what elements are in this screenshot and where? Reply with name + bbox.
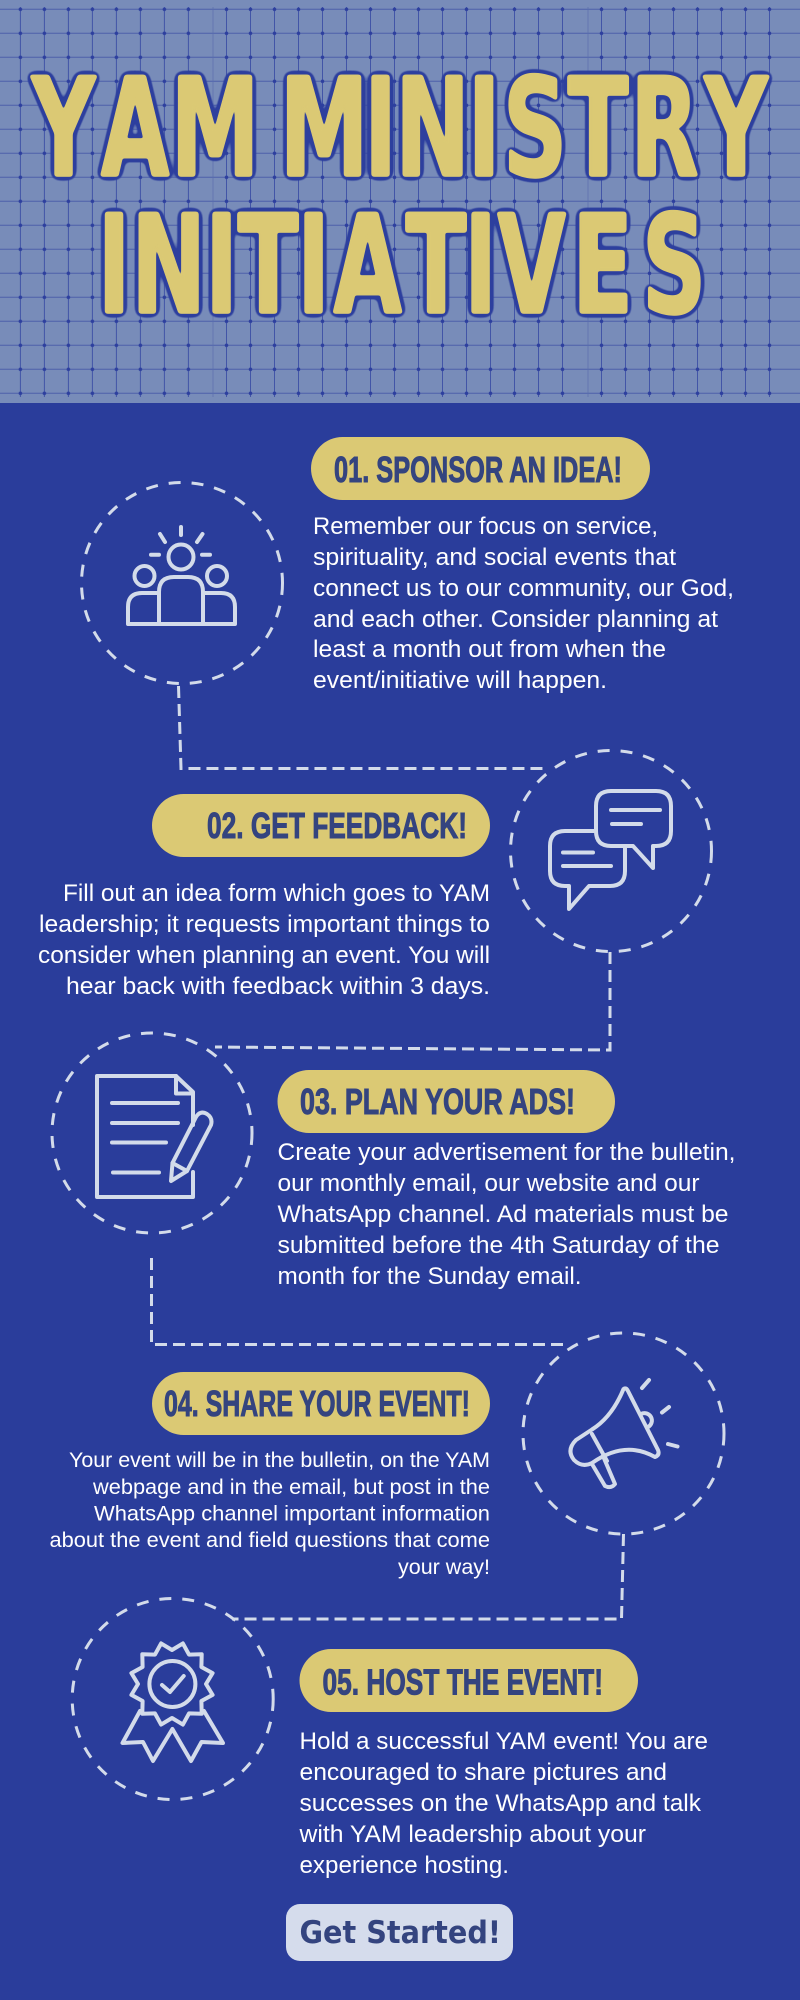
text block 1: connect us to our community, our God, [313, 575, 734, 602]
dashed circle 3 [52, 1033, 252, 1233]
text block 5 [298, 1728, 708, 1879]
heading pill 3: 03. PLAN YOUR ADS! [300, 1081, 575, 1122]
heading pill 5: 05. HOST THE EVENT! [322, 1662, 603, 1702]
title [30, 49, 770, 346]
text block 2 [38, 880, 490, 1000]
text block 2: Fill out an idea form which goes to YAM [63, 880, 490, 907]
panel: step 5 [72, 1598, 708, 1879]
text block 4: WhatsApp channel important information [94, 1502, 490, 1526]
text block 4: Your event will be in the bulletin, on the YAM [69, 1449, 490, 1472]
text block 5: with YAM leadership about your [298, 1821, 646, 1848]
icon: award ribbon [122, 1643, 223, 1761]
text block 5: Hold a successful YAM event! You are [300, 1728, 708, 1755]
text block 1: event/initiative will happen. [313, 667, 607, 694]
text block 1: least a month out from when the [313, 636, 666, 663]
heading pill 4: 04. SHARE YOUR EVENT! [164, 1383, 470, 1424]
text block 4: about the event and field questions that come [50, 1529, 490, 1552]
text block 3: WhatsApp channel. Ad materials must be [278, 1201, 728, 1228]
dashed circle 2 [510, 750, 712, 952]
text block 1: Remember our focus on service, [313, 513, 658, 540]
icon: document and pencil [97, 1076, 212, 1197]
text block 3 [278, 1139, 736, 1290]
icon: chat bubbles [550, 791, 671, 909]
panel: step 1 [82, 437, 734, 694]
panel: step 3 [52, 1033, 736, 1290]
text block 3: month for the Sunday email. [278, 1263, 582, 1290]
title: YAM MINISTRY [30, 49, 770, 209]
text block 2: consider when planning an event. You will [38, 942, 490, 969]
heading pill 2 [152, 794, 490, 857]
connector: step 2 to 3 [215, 952, 610, 1050]
text block 5: successes on the WhatsApp and talk [300, 1790, 702, 1817]
text block 3: our monthly email, our website and our [278, 1170, 700, 1197]
text block 4: webpage and in the email, but post in the [92, 1476, 490, 1499]
connector: step 1 to 2 [178, 686, 544, 768]
text block 2: leadership; it requests important things to [39, 911, 490, 938]
text block 5: experience hosting. [300, 1852, 509, 1879]
text block 4: your way! [398, 1556, 490, 1579]
text block 4 [50, 1449, 490, 1579]
dashed circle 4 [523, 1333, 724, 1534]
icon: people [128, 527, 235, 624]
panel: step 2 [38, 750, 712, 1000]
dashed circle 1 [82, 482, 282, 684]
button: get started [286, 1904, 513, 1961]
heading pill 2: 02. GET FEEDBACK! [207, 805, 467, 846]
dashed circle 5 [72, 1598, 273, 1800]
connector: step 4 to 5 [232, 1534, 624, 1619]
text block 5: encouraged to share pictures and [300, 1759, 667, 1786]
header panel with grid [0, 0, 800, 403]
heading pill 4 [152, 1372, 490, 1435]
panel: step 4 [50, 1333, 724, 1579]
title: INITIATIVES [97, 186, 706, 346]
heading pill 3 [278, 1070, 615, 1133]
connector: step 3 to 4 [152, 1258, 564, 1344]
heading pill 1: 01. SPONSOR AN IDEA! [334, 449, 622, 490]
text block 3: submitted before the 4th Saturday of the [278, 1232, 720, 1259]
text block 3: Create your advertisement for the bulletin, [278, 1139, 736, 1166]
button: get started: Get Started! [300, 1915, 501, 1951]
icon: megaphone [570, 1380, 678, 1487]
text block 1 [313, 513, 734, 694]
heading pill 5 [300, 1649, 638, 1712]
heading pill 1 [311, 437, 650, 500]
text block 1: and each other. Consider planning at [313, 606, 718, 633]
text block 1: spirituality, and social events that [313, 544, 676, 571]
text block 2: hear back with feedback within 3 days. [66, 973, 490, 1000]
